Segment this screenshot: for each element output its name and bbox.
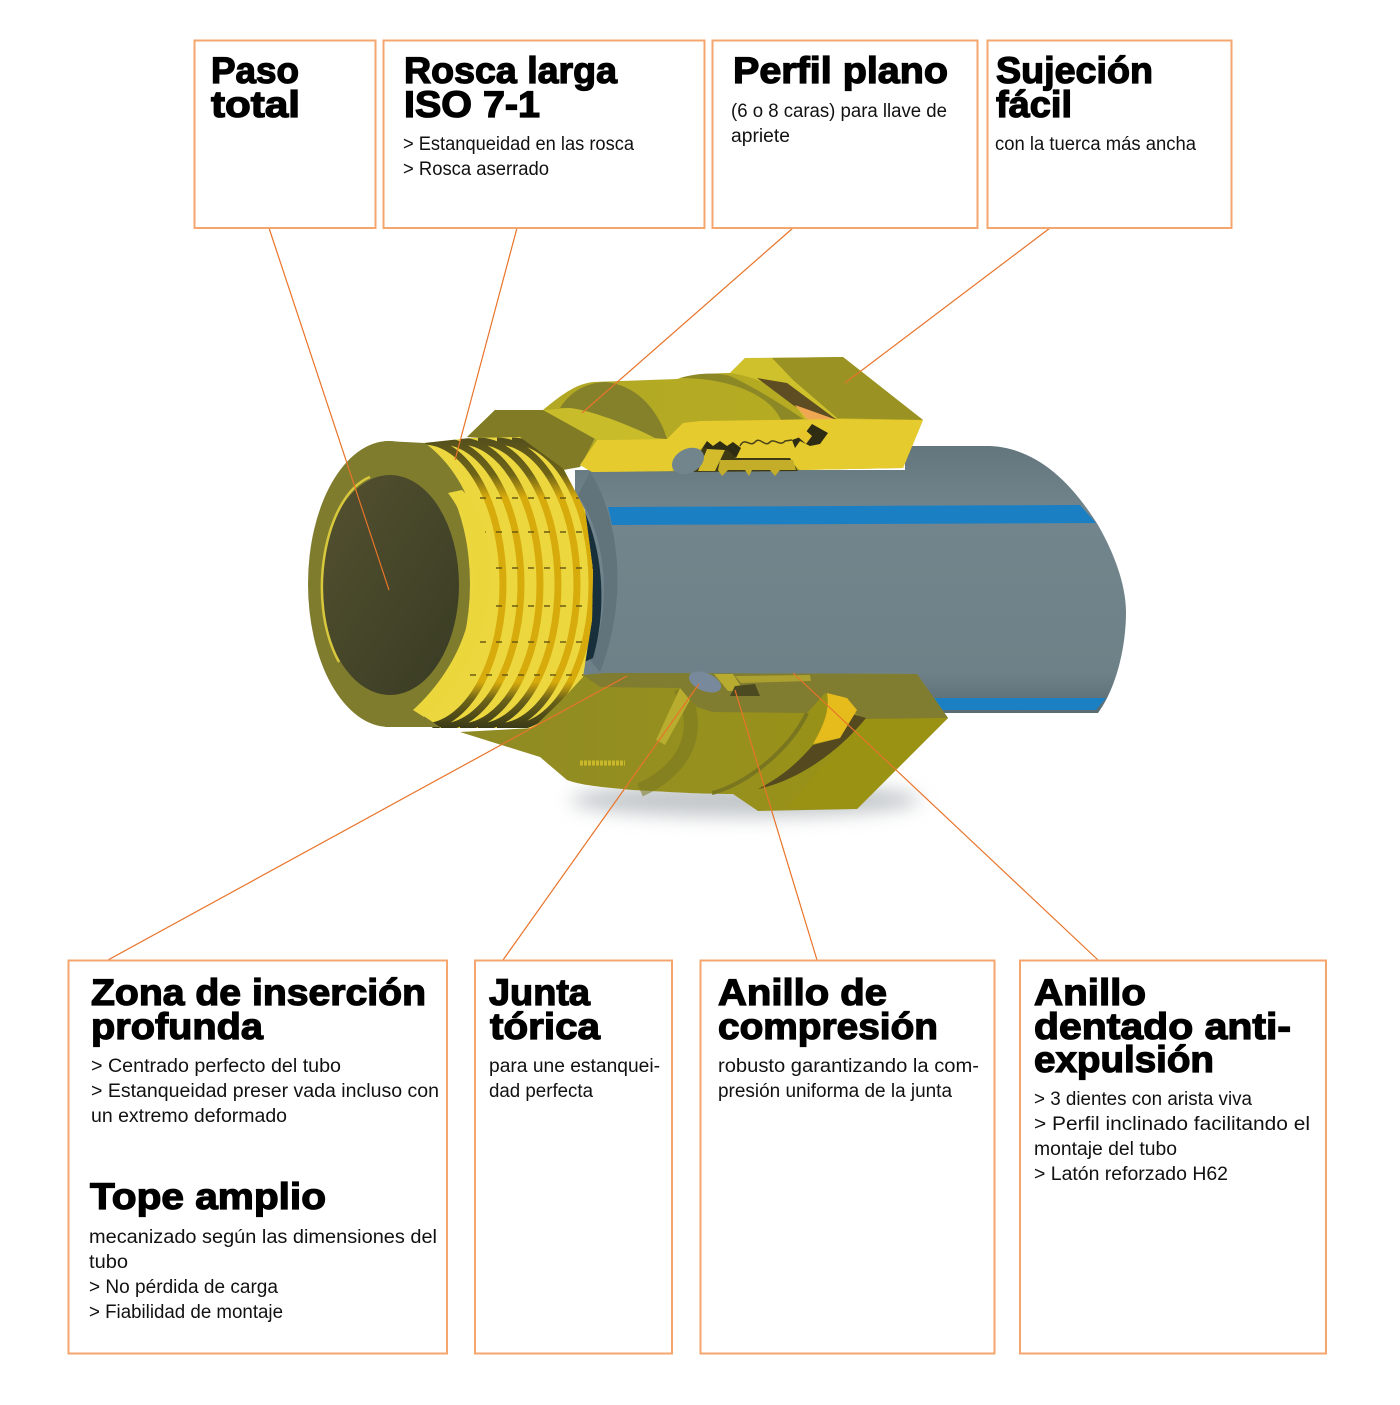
heading: Junta tórica <box>489 972 600 1047</box>
heading: Paso total <box>211 50 300 125</box>
threaded end: bright chamfer <box>413 490 491 717</box>
ground shadow <box>570 783 920 817</box>
heading: Anillo dentado anti-expulsión: expulsión <box>1034 1039 1214 1080</box>
panel: Anillo de compresión <box>700 960 994 1354</box>
text: Anillo de compresión details <box>718 1056 979 1102</box>
heading: Sujeción fácil <box>996 50 1153 125</box>
text: Junta tórica details <box>489 1056 660 1102</box>
heading: Anillo de compresión: Anillo de <box>718 972 887 1013</box>
heading: Zona de inserción profunda: Zona de inserción <box>91 972 426 1013</box>
heading: Junta tórica: Junta <box>489 972 590 1013</box>
text: Tope amplio details: > No pérdida de carga <box>89 1277 278 1298</box>
heading: Sujeción fácil: fácil <box>996 84 1072 125</box>
text: Tope amplio details: tubo <box>89 1252 128 1273</box>
section: compression ring <box>698 449 725 471</box>
text: Perfil plano details: (6 o 8 caras) para llave de <box>731 101 947 122</box>
text: Anillo de compresión details: robusto garantizando la com- <box>718 1056 979 1077</box>
heading: Zona de inserción profunda <box>91 972 426 1047</box>
upper cross-section <box>580 419 923 480</box>
lower section face <box>583 673 948 719</box>
text: Anillo dentado details: > Perfil inclinado facilitando el <box>1034 1114 1310 1135</box>
threaded end: front ring <box>308 441 470 727</box>
text: Anillo de compresión details: presión uniforma de la junta <box>718 1081 952 1102</box>
heading: Paso total: Paso <box>211 50 299 91</box>
text: Anillo dentado details: montaje del tubo <box>1034 1139 1177 1160</box>
text: Zona de inserción details: > Centrado perfecto del tubo <box>91 1056 341 1077</box>
heading: Rosca larga ISO 7-1: ISO 7-1 <box>404 84 540 125</box>
leader lines <box>108 228 1098 960</box>
heading: Junta tórica: tórica <box>490 1006 600 1047</box>
blue stripe <box>608 505 1096 525</box>
lower section: rings <box>714 674 744 691</box>
panel: Rosca larga <box>384 40 704 228</box>
heading: Tope amplio: Tope amplio <box>90 1176 326 1217</box>
text: Anillo dentado details <box>1034 1089 1310 1185</box>
text: Rosca larga details: > Rosca aserrado <box>403 159 549 180</box>
heading: Rosca larga ISO 7-1 <box>404 50 617 125</box>
text: Anillo dentado details: > 3 dientes con arista viva <box>1034 1089 1252 1110</box>
o-ring <box>667 442 709 480</box>
dark collar <box>570 492 601 664</box>
text: Rosca larga details: > Estanqueidad en las rosca <box>403 134 634 155</box>
text: Tope amplio details: > Fiabilidad de montaje <box>89 1302 283 1323</box>
heading: Paso total: total <box>211 84 300 125</box>
lower brass body <box>460 667 948 811</box>
heading: Anillo dentado anti-expulsión: dentado anti- <box>1034 1006 1291 1047</box>
text: Zona de inserción details: > Estanqueidad preser vada incluso con <box>91 1081 439 1102</box>
panel: Junta tórica <box>475 960 672 1354</box>
text: Sujeción fácil details: con la tuerca más ancha <box>995 134 1196 155</box>
heading: Rosca larga ISO 7-1: Rosca larga <box>404 50 617 91</box>
panel: Sujeción fácil <box>988 40 1232 228</box>
text: Tope amplio details: mecanizado según las dimensiones del <box>89 1227 437 1248</box>
illustration: brass compression fitting with pipe <box>308 357 1126 817</box>
heading: Zona de inserción profunda: profunda <box>91 1006 263 1047</box>
section: thread gap <box>703 424 828 458</box>
lower section: o-ring <box>686 667 724 697</box>
hex nut faces <box>772 357 923 420</box>
text: Perfil plano details <box>731 101 947 147</box>
text: Rosca larga details <box>403 134 634 180</box>
text: Junta tórica details: para une estanquei- <box>489 1056 660 1077</box>
text: Perfil plano details: apriete <box>731 126 790 147</box>
heading: Anillo dentado anti-expulsión <box>1034 972 1291 1080</box>
text: Junta tórica details: dad perfecta <box>489 1081 593 1102</box>
text: Zona de inserción details <box>91 1056 439 1127</box>
heading: Perfil plano: Perfil plano <box>733 50 948 91</box>
lower shading arcs <box>640 688 691 790</box>
panel: Anillo dentado anti-expulsión <box>1020 960 1326 1354</box>
threaded end <box>308 430 600 730</box>
panel: Paso total <box>194 40 376 228</box>
text: Zona de inserción details: un extremo deformado <box>91 1106 287 1127</box>
text: Tope amplio details <box>89 1227 437 1323</box>
panel: Perfil plano <box>712 40 978 228</box>
heading: Anillo dentado anti-expulsión: Anillo <box>1034 972 1146 1013</box>
upper brass body <box>467 357 923 472</box>
threaded end: bore <box>321 475 459 695</box>
section: toothed ring <box>718 460 796 476</box>
heading: Anillo de compresión <box>718 972 938 1047</box>
panel: Zona de inserción profunda and Tope amplio <box>68 960 447 1354</box>
heading: Sujeción fácil: Sujeción <box>996 50 1153 91</box>
grey pipe <box>575 446 1126 713</box>
heading: Anillo de compresión: compresión <box>718 1006 938 1047</box>
threaded end: inner glint <box>322 477 370 662</box>
text: Anillo dentado details: > Latón reforzado H62 <box>1034 1164 1228 1185</box>
